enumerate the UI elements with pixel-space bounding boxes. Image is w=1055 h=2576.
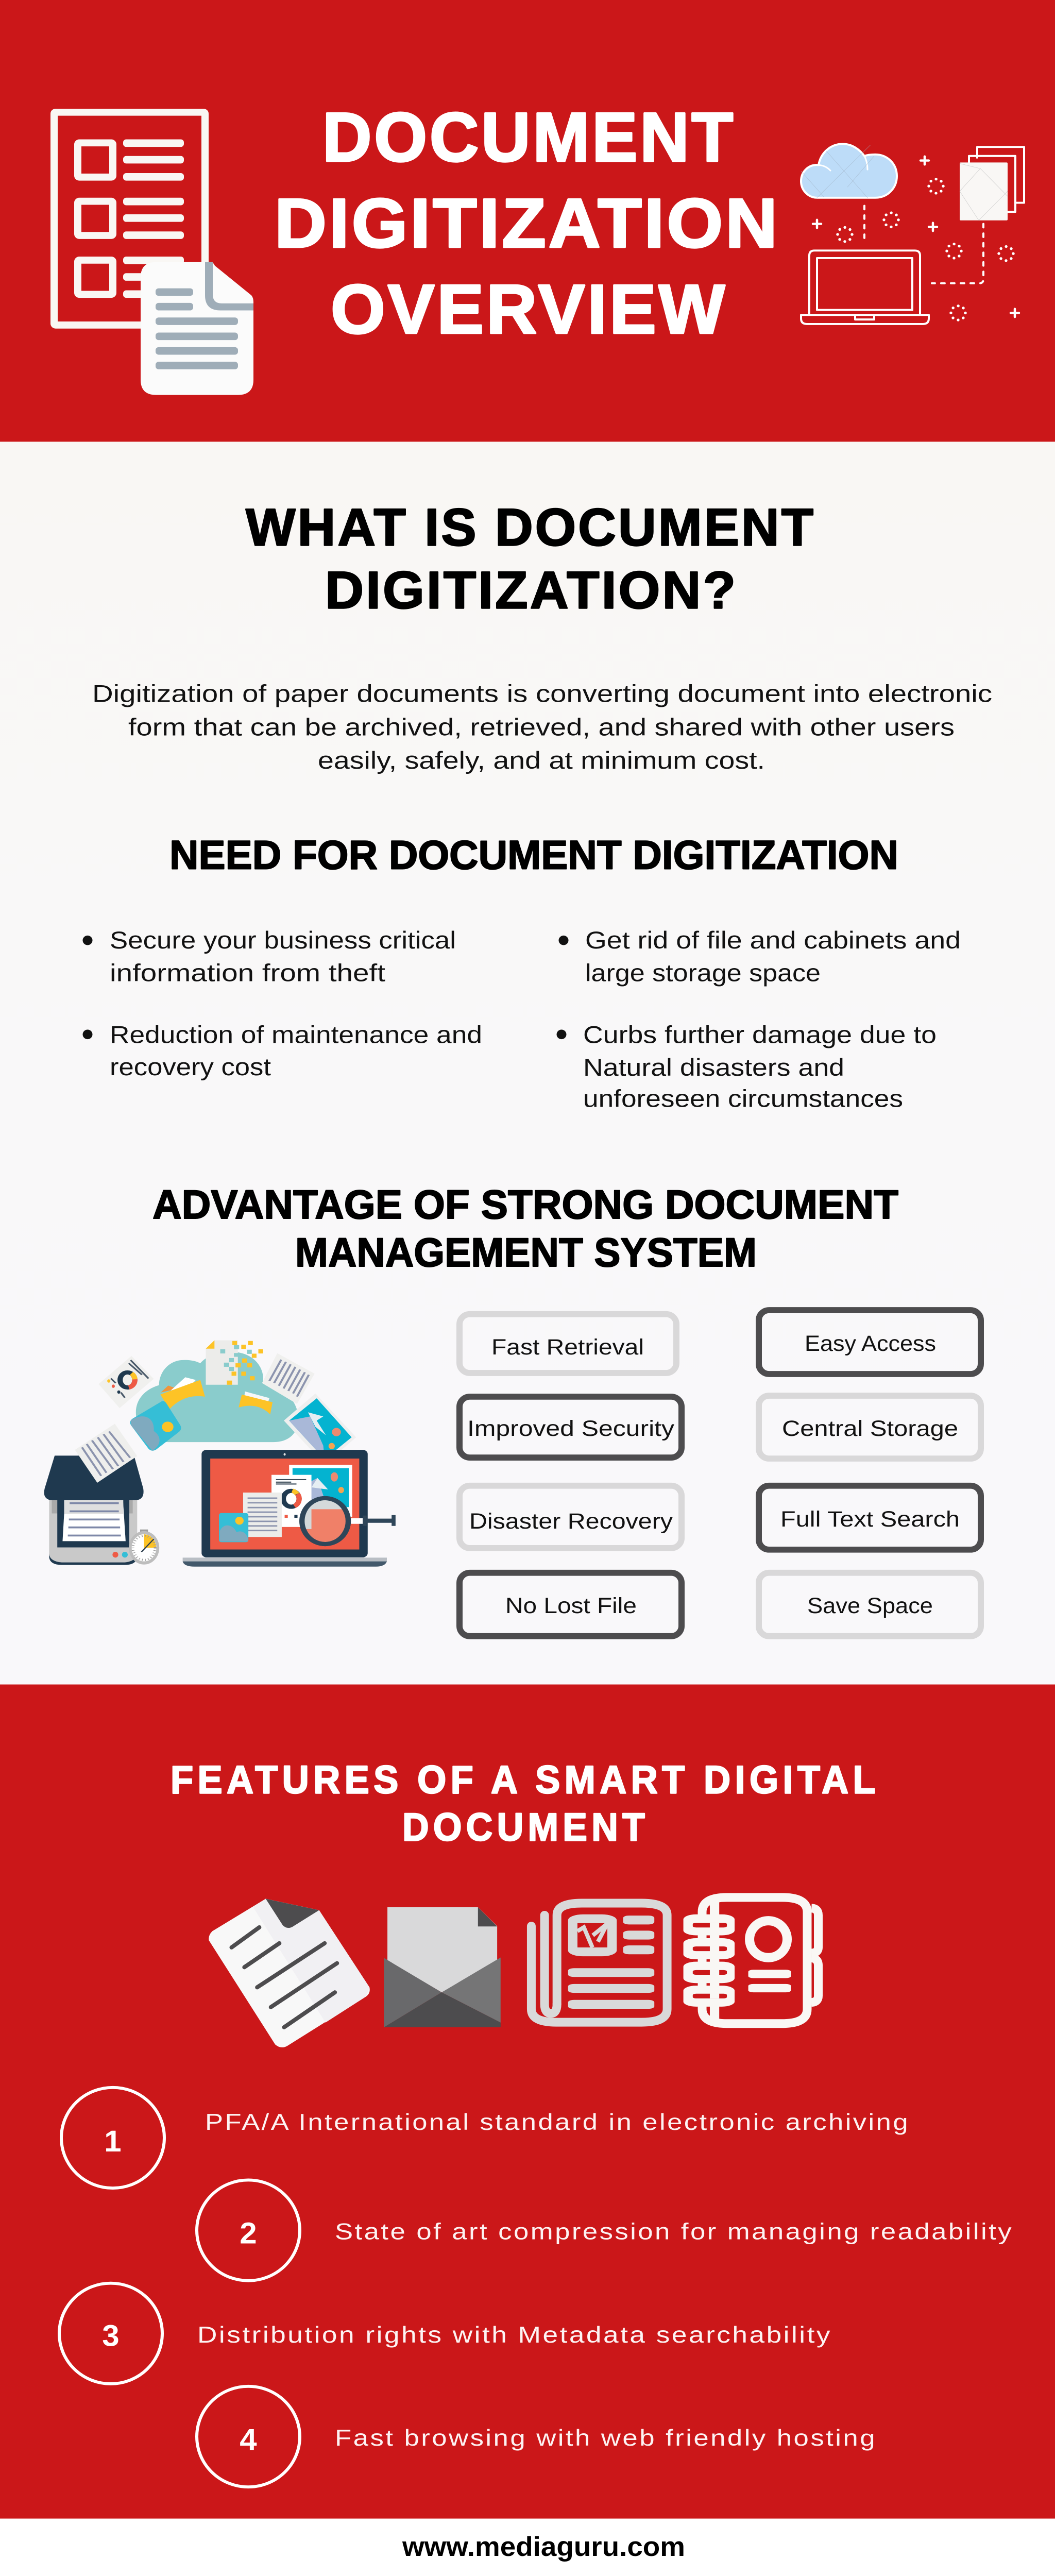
- chart paper: [98, 1356, 154, 1408]
- button: no lost file: No Lost File: [505, 1594, 637, 1618]
- list: need bullets: [82, 927, 961, 1112]
- button: disaster recovery: Disaster Recovery: [469, 1509, 673, 1534]
- icon: envelope with letter: [384, 1907, 501, 2027]
- heading: features: DOCUMENT: [402, 1805, 649, 1849]
- panel: header: [0, 0, 1055, 442]
- bullet: maintenance cost: [82, 1022, 482, 1081]
- button: no lost file: [460, 1573, 682, 1636]
- text: definition paragraph: Digitization of paper documents is converting document into electronic: [92, 681, 992, 707]
- icon: checklist document: [54, 112, 205, 325]
- panel: content: [0, 442, 1055, 1685]
- bullet: damage: Curbs further damage due to: [583, 1022, 937, 1048]
- bullet: damage: [556, 1022, 937, 1112]
- photo card: [130, 1401, 181, 1451]
- heading: what is document digitization: [246, 498, 815, 619]
- bullet: damage: Natural disasters and: [583, 1054, 844, 1081]
- bullet: file cabinets: large storage space: [585, 960, 821, 987]
- item 1: 1: [104, 2124, 122, 2158]
- bullet: file cabinets: [558, 927, 961, 987]
- heading: what is document digitization: WHAT IS DOCUMENT: [246, 498, 815, 556]
- title: DOCUMENT: [322, 98, 736, 176]
- item 1: PFA/A International standard in electronic archiving: [205, 2109, 910, 2135]
- paper right: [262, 1353, 315, 1404]
- item 2: [197, 2180, 1013, 2281]
- panel: features: [0, 1685, 1055, 2519]
- button: full text search: [759, 1486, 981, 1550]
- text: definition paragraph: form that can be archived, retrieved, and shared with other users: [128, 714, 955, 741]
- icon: text file: [141, 262, 253, 395]
- item 3: [59, 2283, 832, 2384]
- scanner: [44, 1455, 144, 1565]
- icon: tilted document: [209, 1899, 370, 2047]
- item 2: State of art compression for managing readability: [335, 2218, 1013, 2245]
- item 3: 3: [102, 2318, 120, 2353]
- photo right: [284, 1394, 356, 1464]
- heading: features: [171, 1758, 880, 1849]
- item 1: [61, 2088, 910, 2188]
- magnifying glass: [302, 1498, 396, 1544]
- text: definition paragraph: easily, safely, and at minimum cost.: [318, 748, 765, 774]
- heading: need for document digitization: NEED FOR DOCUMENT DIGITIZATION: [169, 832, 898, 877]
- button: improved security: [460, 1397, 682, 1458]
- feature icons: [209, 1897, 819, 2047]
- item 4: 4: [240, 2422, 257, 2456]
- button: save space: Save Space: [807, 1594, 933, 1618]
- icon: spiral notebook: [684, 1897, 819, 2024]
- button: fast retrieval: [460, 1314, 676, 1373]
- heading: advantage: MANAGEMENT SYSTEM: [295, 1230, 757, 1275]
- item 2: 2: [240, 2216, 257, 2250]
- title: [275, 98, 780, 348]
- item 4: Fast browsing with web friendly hosting: [335, 2425, 877, 2451]
- button: central storage: [759, 1396, 981, 1459]
- laptop: [183, 1450, 387, 1567]
- footer: [0, 2519, 1055, 2576]
- item 4: [197, 2386, 877, 2487]
- bullet: secure information: Secure your business critical: [110, 927, 456, 954]
- icon: cloud, laptop and files network: [801, 144, 1024, 324]
- button: disaster recovery: [460, 1486, 682, 1548]
- bullet: maintenance cost: Reduction of maintenance and: [110, 1022, 482, 1048]
- icon: newspaper: [531, 1903, 667, 2022]
- stopwatch: [129, 1530, 159, 1565]
- button: save space: [759, 1573, 981, 1636]
- buttons: advantages: [460, 1310, 981, 1636]
- button: easy access: [759, 1310, 981, 1374]
- pixelated document: [206, 1341, 263, 1385]
- heading: features: FEATURES OF A SMART DIGITAL: [171, 1758, 880, 1802]
- bullet: file cabinets: Get rid of file and cabinets and: [585, 927, 961, 954]
- button: central storage: Central Storage: [782, 1417, 958, 1441]
- title: OVERVIEW: [331, 270, 727, 348]
- list: features numbered: [59, 2088, 1013, 2487]
- button: fast retrieval: Fast Retrieval: [491, 1335, 644, 1360]
- cloud: [136, 1352, 298, 1442]
- title: DIGITIZATION: [275, 184, 780, 262]
- button: easy access: Easy Access: [805, 1332, 936, 1356]
- button: full text search: Full Text Search: [780, 1507, 960, 1532]
- heading: advantage: ADVANTAGE OF STRONG DOCUMENT: [152, 1182, 898, 1227]
- bullet: damage: unforeseen circumstances: [583, 1086, 903, 1112]
- illustration: scanner, cloud and laptop: [44, 1341, 396, 1567]
- footer url: www.mediaguru.com: [402, 2532, 685, 2562]
- heading: advantage: [152, 1182, 898, 1275]
- button: improved security: Improved Security: [467, 1417, 674, 1441]
- bullet: secure information: [82, 927, 456, 987]
- folders: [160, 1377, 273, 1414]
- item 3: Distribution rights with Metadata searchability: [197, 2321, 832, 2348]
- heading: what is document digitization: DIGITIZATION?: [325, 561, 738, 619]
- bullet: secure information: information from theft: [110, 960, 385, 987]
- text: definition paragraph: [92, 681, 992, 774]
- bullet: maintenance cost: recovery cost: [110, 1054, 271, 1081]
- paper lower left: [75, 1423, 137, 1483]
